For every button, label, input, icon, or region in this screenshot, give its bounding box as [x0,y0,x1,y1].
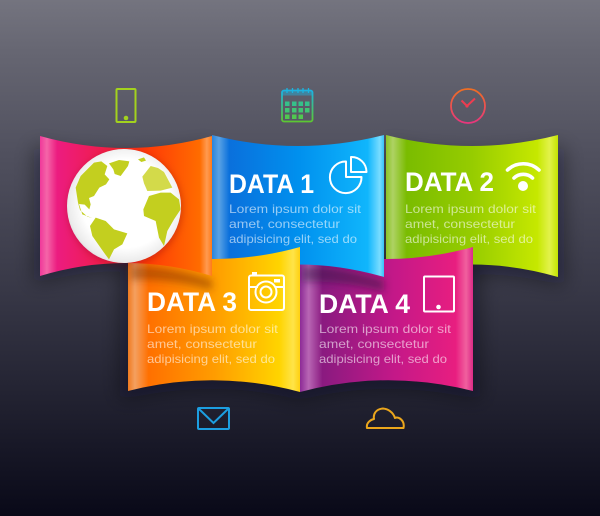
text block: data 2 [405,202,537,246]
text block: data 1: Lorem ipsum dolor sit [229,202,362,216]
text block: data 2: Lorem ipsum dolor sit [405,202,537,216]
panel: globe [40,136,212,276]
panel shape: orange [128,247,300,392]
text block: data 3: amet, consectetur [147,337,257,351]
panel shape: green [386,135,558,277]
globe shadow [68,151,182,265]
text block: data 1: adipisicing elit, sed do [229,232,357,246]
text block: data 3 [147,322,279,366]
panel: data 1 [212,135,384,277]
panel shadows [34,146,564,400]
icon: cloud [367,408,404,428]
icon: envelope [198,408,229,429]
heading: data 4: DATA 4 [319,289,410,319]
panel: data 2 [386,135,558,277]
text block: data 2: amet, consectetur [405,217,515,231]
red shadow on orange [130,266,212,290]
icon: wifi [508,164,539,191]
heading: data 2: DATA 2 [405,167,494,197]
heading: data 1: DATA 1 [229,169,314,199]
blue shadow on magenta [302,266,384,292]
panel: data 4 [300,247,473,392]
icon: phone [116,89,136,122]
icon: pie chart [330,157,366,193]
panel shape: blue [212,135,384,277]
icon: camera [249,272,284,310]
text block: data 4: amet, consectetur [319,337,429,351]
icon: globe [67,149,181,263]
icon: clock [451,89,485,123]
panel: data 3 [128,247,300,392]
text block: data 4 [319,322,452,366]
panel shape: magenta [300,247,473,392]
text block: data 4: adipisicing elit, sed do [319,352,447,366]
text block: data 2: adipisicing elit, sed do [405,232,533,246]
text block: data 3: Lorem ipsum dolor sit [147,322,279,336]
heading: data 3: DATA 3 [147,287,237,317]
text block: data 4: Lorem ipsum dolor sit [319,322,452,336]
icon: calendar [282,88,312,122]
text block: data 1: amet, consectetur [229,217,340,231]
panel shape: red [40,136,212,276]
text block: data 1 [229,202,362,246]
icon: tablet [424,276,454,312]
text block: data 3: adipisicing elit, sed do [147,352,275,366]
